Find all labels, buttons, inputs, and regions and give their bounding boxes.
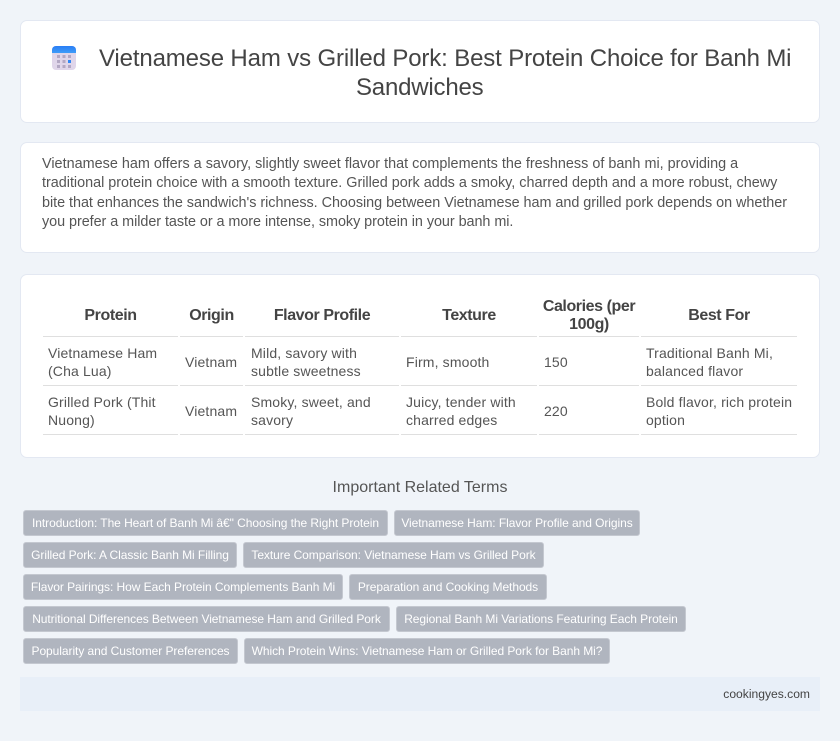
panel: comparison table xyxy=(20,274,820,458)
table row: Vietnamese Ham: Vietnamese Ham xyxy=(48,345,157,361)
table row: Grilled Pork: charred edges xyxy=(406,412,497,428)
title xyxy=(99,45,791,101)
table row: Grilled Pork: option xyxy=(646,412,685,428)
tag: Nutritional Differences Between Vietnamese Ham and Grilled Pork xyxy=(32,612,381,626)
footer source: cookingyes.com xyxy=(723,687,810,701)
table row: Vietnamese Ham: Traditional Banh Mi, xyxy=(646,345,773,361)
table header row xyxy=(84,298,750,333)
tag xyxy=(23,638,238,664)
tag: Texture Comparison: Vietnamese Ham vs Grilled Pork xyxy=(251,548,536,562)
icon: calendar xyxy=(52,46,76,70)
table header row: Protein xyxy=(84,307,137,324)
table row: Grilled Pork xyxy=(48,394,792,428)
table row: Vietnamese Ham: (Cha Lua) xyxy=(48,363,112,379)
table header row: Texture xyxy=(442,307,496,324)
table row: Vietnamese Ham: Vietnam xyxy=(185,354,237,370)
table row: Vietnamese Ham xyxy=(48,345,773,379)
table row: Grilled Pork: savory xyxy=(251,412,293,428)
table row: Grilled Pork: Vietnam xyxy=(185,403,237,419)
tag: Which Protein Wins: Vietnamese Ham or Grilled Pork for Banh Mi? xyxy=(252,644,602,658)
tag list: related terms xyxy=(23,510,686,664)
tag: Grilled Pork: A Classic Banh Mi Filling xyxy=(31,548,229,562)
table row: Grilled Pork: Grilled Pork (Thit xyxy=(48,394,156,410)
text block: summary: Vietnamese ham offers a savory, slightly sweet flavor that complements the freshness of banh mi, providing a xyxy=(42,156,738,172)
tag xyxy=(23,574,343,600)
tag: Preparation and Cooking Methods xyxy=(358,580,538,594)
table header row: Flavor Profile xyxy=(274,307,370,324)
text block: summary: traditional protein choice with a smooth texture. Grilled pork adds a smoky, charred depth and a more robust, chewy xyxy=(42,175,777,191)
tag xyxy=(243,542,544,568)
tag: Popularity and Customer Preferences xyxy=(32,644,230,658)
table header row: Best For xyxy=(688,307,750,324)
tag: Vietnamese Ham: Flavor Profile and Origins xyxy=(401,516,633,530)
panel: title header xyxy=(20,20,820,123)
tag xyxy=(394,510,640,536)
heading: related terms: Important Related Terms xyxy=(333,479,507,496)
title: Vietnamese Ham vs Grilled Pork: Best Protein Choice for Banh Mi xyxy=(99,45,791,72)
table row: Grilled Pork: Juicy, tender with xyxy=(406,394,516,410)
tag xyxy=(396,606,686,632)
tag xyxy=(23,542,237,568)
table row: Vietnamese Ham: Firm, smooth xyxy=(406,354,489,370)
tag: Flavor Pairings: How Each Protein Complements Banh Mi xyxy=(31,580,335,594)
table header row: Calories (per 100g) xyxy=(543,298,635,333)
text block: summary: you prefer a milder taste or a more intense, smoky protein in your banh mi. xyxy=(42,214,513,230)
table row: Vietnamese Ham: balanced flavor xyxy=(646,363,743,379)
table row: Vietnamese Ham: 150 xyxy=(544,354,568,370)
table row: Grilled Pork: Nuong) xyxy=(48,412,95,428)
title: Sandwiches xyxy=(356,74,483,101)
table row: Vietnamese Ham: subtle sweetness xyxy=(251,363,361,379)
tag xyxy=(349,574,547,600)
table row: Grilled Pork: Smoky, sweet, and xyxy=(251,394,371,410)
tag: Introduction: The Heart of Banh Mi â€" Choosing the Right Protein xyxy=(32,516,379,530)
table row: Vietnamese Ham: Mild, savory with xyxy=(251,345,357,361)
tag xyxy=(23,606,390,632)
tag xyxy=(244,638,610,664)
table header row: Origin xyxy=(189,307,234,324)
text block: summary: bite that enhances the sandwich's richness. Choosing between Vietnamese ham and grilled pork depends on whether xyxy=(42,195,787,211)
footer bar xyxy=(20,677,820,711)
table row: Grilled Pork: 220 xyxy=(544,403,568,419)
tag xyxy=(23,510,388,536)
tag: Regional Banh Mi Variations Featuring Each Protein xyxy=(404,612,678,626)
panel: summary text xyxy=(20,142,820,253)
text block: summary xyxy=(42,156,787,230)
table row: Grilled Pork: Bold flavor, rich protein xyxy=(646,394,792,410)
